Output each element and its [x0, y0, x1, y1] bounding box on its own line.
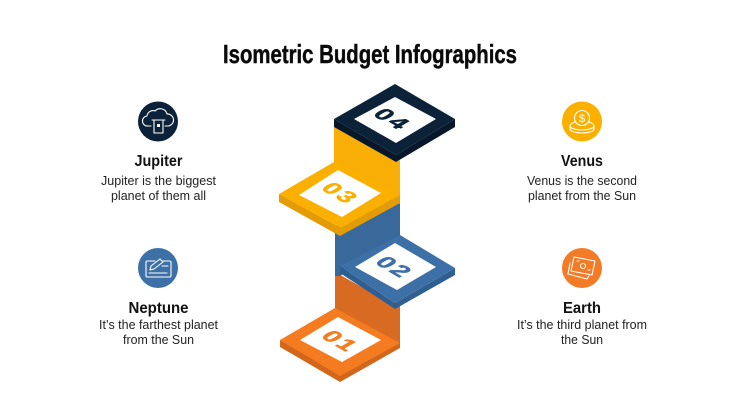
step 04 platform: navy — [334, 84, 455, 162]
text: Earth description: It’s the third planet from — [517, 318, 647, 332]
icon: cloud and phone — [138, 102, 178, 142]
title: Isometric Budget Infographics — [223, 39, 517, 69]
icon: dollar coin: $ — [579, 113, 585, 125]
panel: Jupiter — [101, 102, 217, 203]
step 01 wall: orange — [335, 272, 400, 378]
icon: banknotes — [562, 248, 602, 288]
heading: Neptune: Neptune — [128, 300, 189, 317]
step 01 platform: orange — [280, 308, 400, 382]
text: Jupiter description: Jupiter is the biggest — [101, 174, 217, 188]
step 04 platform: navy: 04 — [367, 106, 417, 134]
step 02 platform: blue — [340, 235, 455, 309]
step 03 platform: yellow: 03 — [315, 180, 365, 208]
text: Venus description: planet from the Sun — [528, 189, 636, 203]
step 03 wall: yellow — [334, 127, 400, 204]
text: Neptune description: It’s the farthest planet — [99, 318, 219, 332]
text: Earth description — [517, 318, 647, 347]
text: Earth description: the Sun — [561, 333, 603, 347]
heading: Earth: Earth — [563, 300, 601, 317]
step 02 wall: blue — [335, 195, 400, 276]
heading: Jupiter: Jupiter — [134, 153, 182, 170]
text: Venus description: Venus is the second — [527, 174, 637, 188]
text: Venus description — [527, 174, 637, 203]
text: Neptune description: from the Sun — [123, 333, 194, 347]
step 02 platform: blue: 02 — [369, 254, 419, 282]
panel: Neptune — [99, 248, 219, 347]
step 03 platform: yellow — [279, 162, 400, 236]
text: Jupiter description — [101, 174, 217, 203]
step 01 platform: orange: 01 — [315, 328, 365, 356]
icon: cheque and pen — [138, 248, 178, 288]
heading: Venus: Venus — [561, 153, 603, 170]
panel: Earth — [517, 248, 647, 347]
text: Neptune description — [99, 318, 219, 347]
text: Jupiter description: planet of them all — [111, 189, 206, 203]
isometric stack chart — [279, 84, 455, 382]
panel: Venus — [527, 102, 637, 203]
